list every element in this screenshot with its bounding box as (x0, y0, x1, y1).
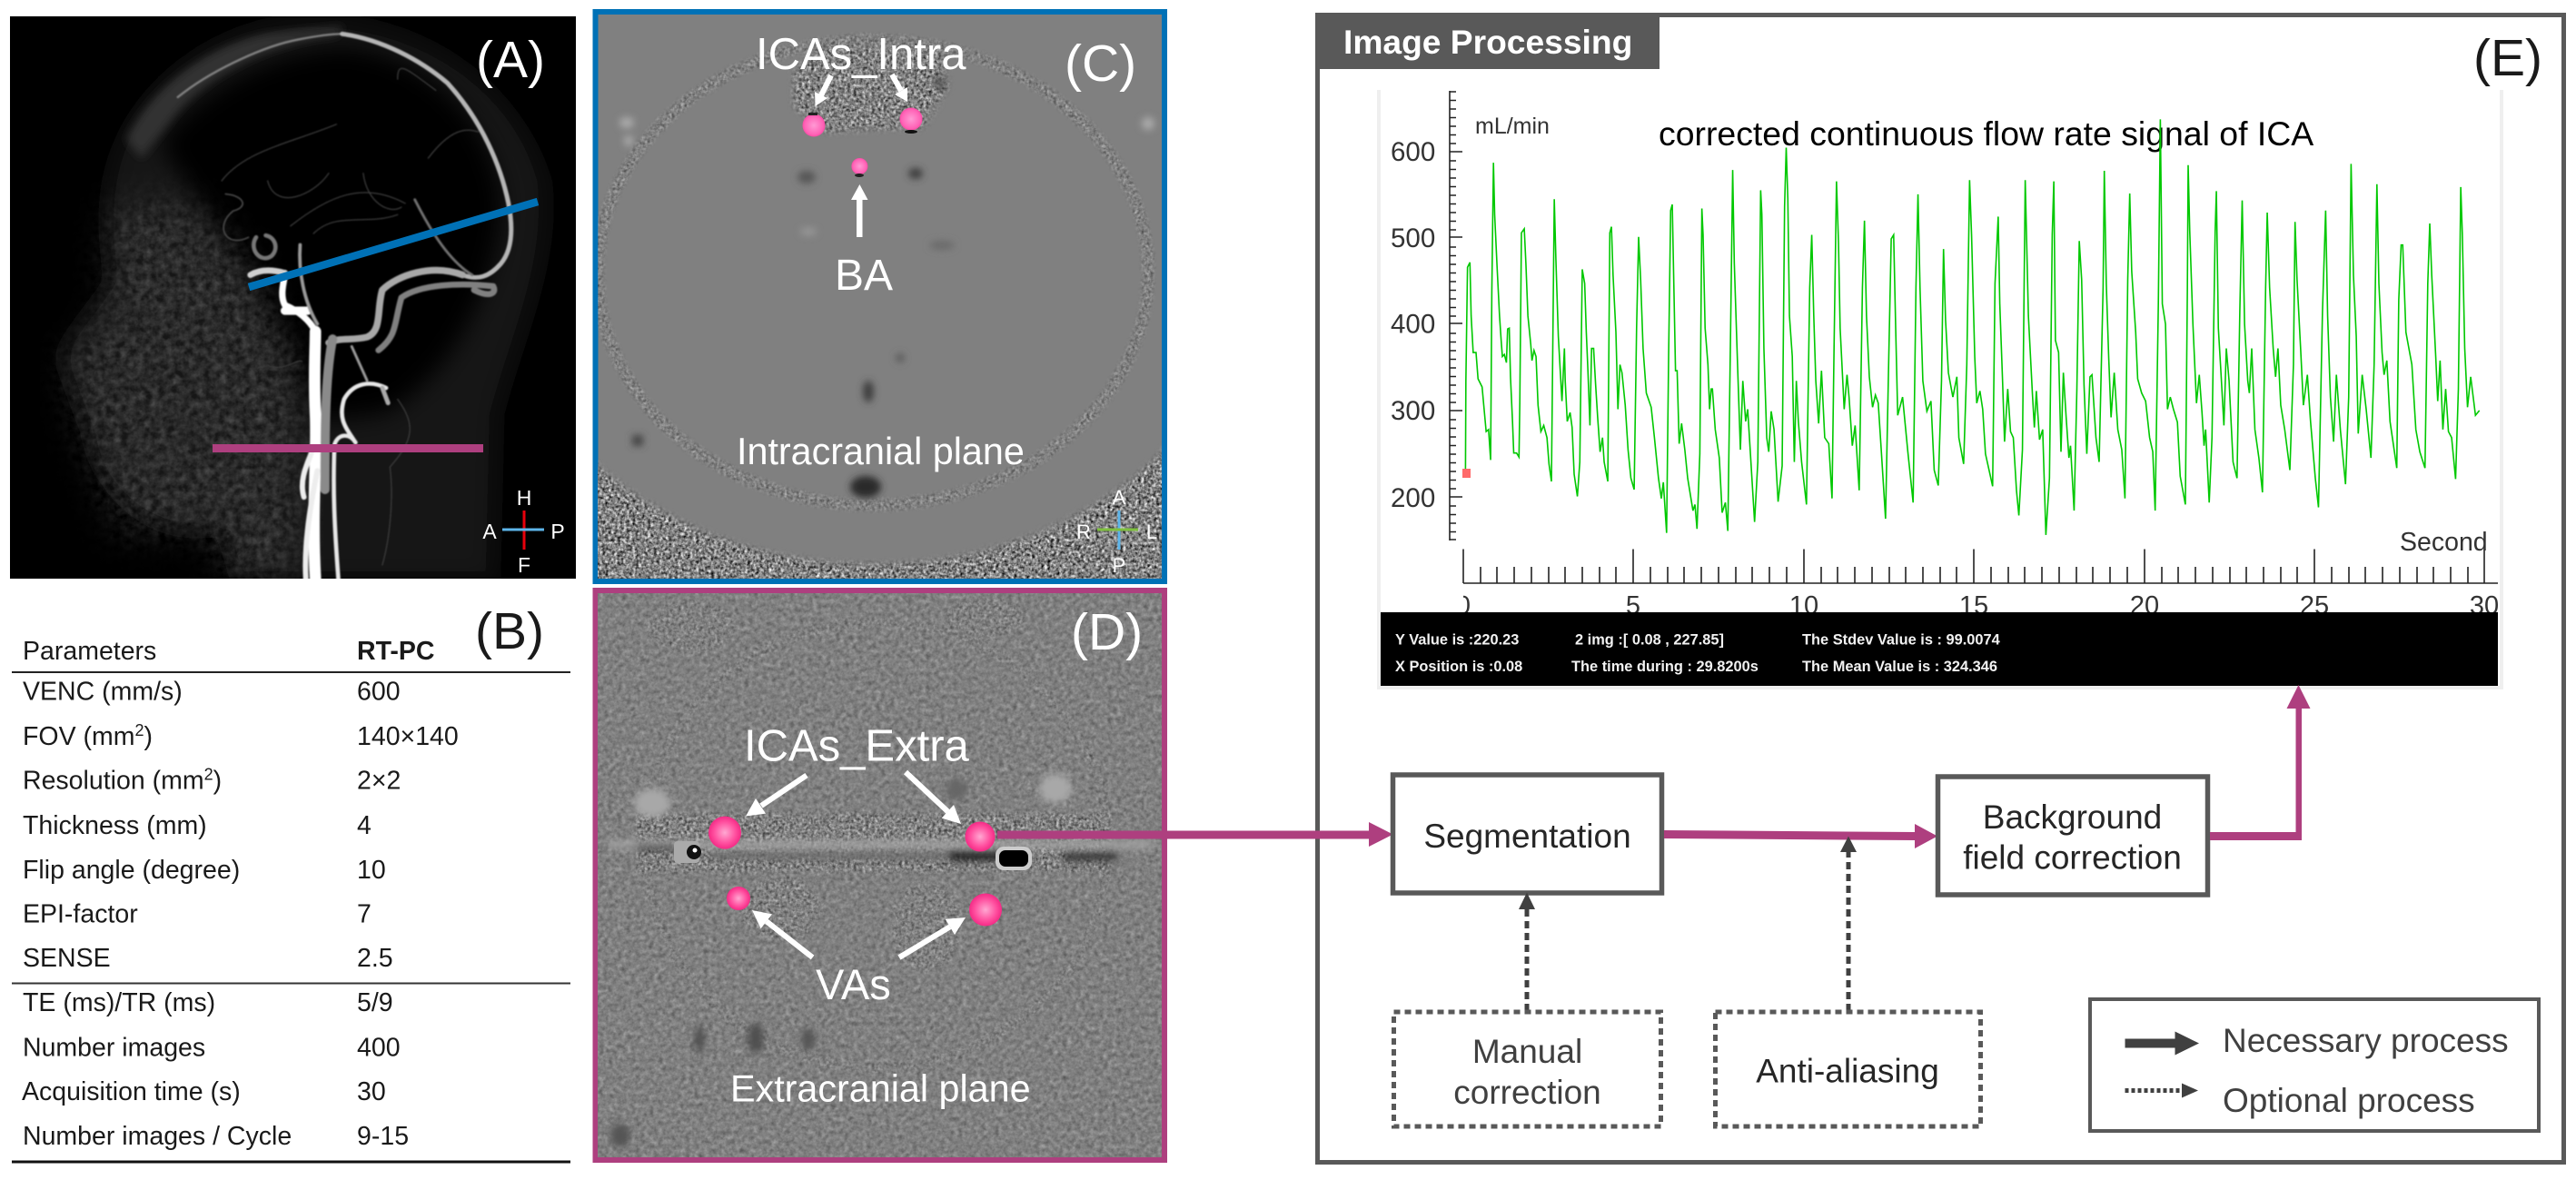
table rows: 140×140 (357, 722, 459, 751)
chart: flow rate signal (1377, 90, 2503, 689)
orientation cross: L (1146, 521, 1157, 543)
chart title: corrected continuous flow rate signal of ICA (1659, 114, 2313, 153)
x axis: 25 (2300, 591, 2329, 620)
table rows: 2.5 (357, 944, 393, 973)
table rows: ) (213, 767, 222, 796)
box: background field correction (1938, 777, 2207, 895)
label: ICAs_Extra: ICAs_Extra (744, 721, 970, 770)
vessels (178, 34, 511, 579)
stats bar: The Stdev Value is : 99.0074 (1802, 632, 2001, 649)
legend (2090, 999, 2539, 1131)
stats bar: The time during : 29.8200s (1571, 659, 1759, 675)
arrow: ICA right (892, 74, 907, 102)
panel E: image processing frame (1315, 13, 2563, 1163)
table rows: EPI-factor (23, 899, 138, 928)
arrow: manual correction optional (1519, 892, 1535, 1011)
table rows: 400 (357, 1033, 401, 1062)
box: manual correction (1393, 1012, 1660, 1126)
label: BA: BA (835, 252, 893, 300)
table rows: 7 (357, 899, 372, 928)
x axis: Second (2400, 528, 2488, 557)
table rows: 2 (134, 721, 144, 739)
y axis (1391, 91, 1550, 540)
box: background field correction: field correction (1963, 839, 2182, 876)
legend: optional: Optional process (2223, 1082, 2475, 1119)
table rows: Flip angle (degree) (23, 856, 240, 885)
x axis: 30 (2470, 591, 2499, 620)
table rows: Acquisition time (s) (22, 1077, 241, 1106)
table rows: SENSE (23, 944, 111, 973)
box: segmentation: Segmentation (1423, 818, 1631, 855)
label: VAs: VAs (816, 960, 891, 1008)
table rows: Number images / Cycle (23, 1122, 292, 1151)
label B: (B) (475, 602, 544, 660)
panel B: parameter table (12, 602, 570, 1163)
table rows: 10 (357, 856, 386, 885)
panel A: sagittal angiogram (10, 16, 576, 579)
y axis: 500 (1391, 223, 1435, 253)
box: anti-aliasing: Anti-aliasing (1756, 1052, 1939, 1090)
table rows: VENC (mm/s) (23, 678, 183, 707)
dark spots (674, 841, 1032, 870)
x axis: 10 (1789, 591, 1818, 620)
arrow: anti-aliasing optional (1840, 836, 1857, 1011)
arrow: ICA left (815, 75, 831, 106)
orientation cross: H (517, 486, 531, 510)
y axis: 200 (1391, 483, 1435, 513)
vessel markers (803, 107, 923, 177)
orientation cross: F (518, 553, 530, 577)
label: C: (C) (1065, 35, 1136, 93)
arrow: ICA extra right (906, 772, 961, 824)
table rows: 9-15 (357, 1122, 409, 1151)
panel D: extracranial plane (596, 590, 1164, 1160)
arrow: correction to chart (2210, 685, 2311, 840)
stats bar: Y Value is :220.23 (1395, 632, 1519, 649)
x axis: 5 (1626, 591, 1640, 620)
table rows: 4 (357, 811, 372, 840)
table rows: FOV (mm (23, 722, 134, 751)
orientation cross (1076, 486, 1157, 577)
y axis: 600 (1391, 137, 1435, 167)
y axis: 300 (1391, 396, 1435, 426)
panel C: intracranial plane (596, 12, 1164, 581)
orientation cross: A (1113, 486, 1126, 509)
legend: necessary: Necessary process (2223, 1022, 2509, 1059)
box: manual correction: correction (1453, 1074, 1601, 1111)
table rows: 5/9 (357, 988, 393, 1017)
table heading (23, 637, 434, 666)
y axis: 400 (1391, 309, 1435, 340)
head glow (61, 19, 546, 579)
arrow: VA left (752, 910, 813, 957)
table heading: Parameters (23, 637, 156, 666)
arrow: panel D to segmentation (997, 822, 1393, 847)
stats bar: 2 img :[ 0.08 , 227.85] (1575, 632, 1724, 649)
heading tab (1315, 13, 1660, 69)
stats bar (1381, 612, 2498, 686)
orientation cross: A (482, 520, 497, 543)
label: D: (D) (1071, 603, 1143, 661)
vessel markers (708, 817, 1002, 927)
box: anti-aliasing (1715, 1012, 1980, 1126)
neck band (609, 774, 1154, 1147)
table rows: 2×2 (357, 767, 401, 796)
arrow: segmentation to background correction (1664, 824, 1937, 848)
x axis (1456, 528, 2499, 620)
arrow: BA (851, 184, 868, 237)
table rows: 600 (357, 678, 401, 707)
arrow: VA right (899, 917, 966, 957)
marker: selected point (1462, 469, 1471, 478)
label: plane name: Extracranial plane (730, 1068, 1031, 1110)
table rows (22, 678, 459, 1151)
stats bar: X Position is :0.08 (1395, 659, 1522, 675)
orientation cross: P (550, 520, 565, 543)
x axis: 0 (1456, 591, 1471, 620)
table rows: 30 (357, 1077, 386, 1106)
label E: (E) (2473, 29, 2542, 87)
label: ICAs_Intra: ICAs_Intra (756, 30, 966, 79)
label A: (A) (476, 31, 545, 89)
y axis: mL/min (1475, 114, 1550, 139)
arrow: ICA extra left (746, 776, 807, 816)
table rows: 2 (204, 765, 213, 783)
heading tab: Image Processing (1343, 23, 1632, 61)
table rows: ) (144, 722, 153, 751)
table rows: Thickness (mm) (23, 811, 207, 840)
line: blue intracranial plane (249, 202, 538, 287)
x axis: 15 (1959, 591, 1988, 620)
line: magenta extracranial plane (213, 444, 483, 452)
table heading: RT-PC (357, 637, 434, 666)
table rows: Number images (23, 1033, 205, 1062)
orientation cross (482, 491, 563, 572)
box: background field correction: Background (1983, 798, 2162, 836)
label: plane name: Intracranial plane (737, 431, 1025, 472)
x axis: 20 (2130, 591, 2159, 620)
stats bar: The Mean Value is : 324.346 (1802, 659, 1997, 675)
box: manual correction: Manual (1472, 1033, 1582, 1070)
artefact spots (619, 75, 1154, 498)
box: segmentation (1393, 775, 1662, 893)
signal trace (1465, 119, 2480, 535)
orientation cross: P (1113, 554, 1125, 577)
table rows: Resolution (mm (23, 767, 204, 796)
table rows: TE (ms)/TR (ms) (23, 988, 215, 1017)
orientation cross: R (1076, 521, 1091, 543)
